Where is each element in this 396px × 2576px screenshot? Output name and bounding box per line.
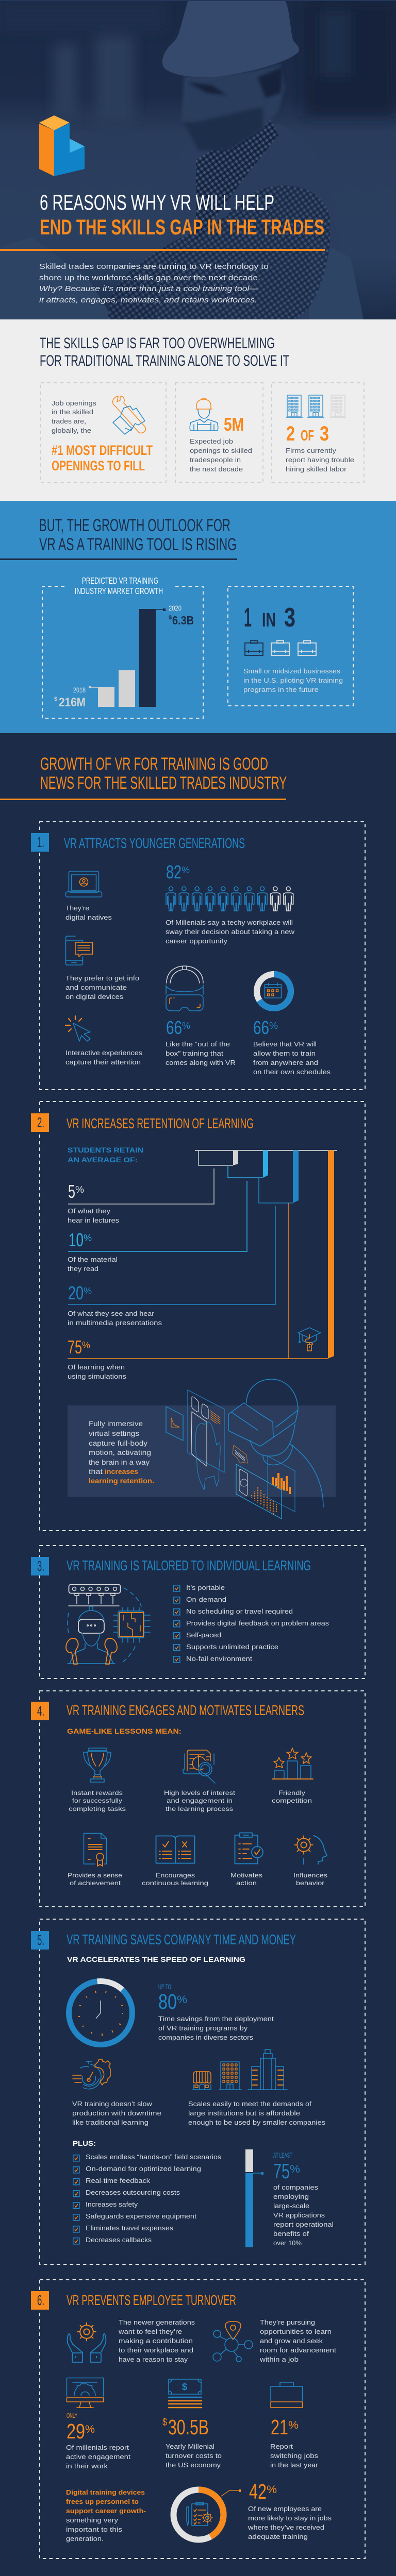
intro paragraph <box>39 263 269 304</box>
stat: 20 percent multimedia: 20 <box>68 1282 84 1303</box>
number badge 6 <box>31 2291 49 2310</box>
text: instant rewards: Instant rewards <box>71 1789 123 1797</box>
text: operational benefits: of companies <box>273 2184 318 2191</box>
number badge 4: 4. <box>37 1703 44 1719</box>
text: contribution: to their workplace and <box>119 2347 193 2354</box>
checklist: individual learning: On-demand <box>186 1596 226 1603</box>
subheading: plus: PLUS: <box>73 2139 96 2147</box>
text: contribution: want to feel they’re <box>118 2328 182 2335</box>
heading: growth outlook: BUT, THE GROWTH OUTLOOK FOR <box>39 516 230 535</box>
stat: only 29 percent: ONLY <box>67 2412 77 2419</box>
chart: clock ring <box>69 1981 132 2044</box>
text: turnover costs: the US economy <box>166 2462 221 2469</box>
text: digital training devices: Digital training devices <box>66 2489 145 2496</box>
panel: growth outlook <box>0 501 396 733</box>
stat: up to 80 percent: % <box>177 1994 187 2006</box>
checklist: individual learning: It’s portable <box>186 1584 225 1591</box>
subheading: game-like lessons: GAME-LIKE LESSONS MEAN: <box>67 1727 182 1735</box>
stat: 30.5B: $ <box>162 2417 167 2428</box>
stat: 10 percent reading <box>68 1229 118 1273</box>
text: train from anywhere: from anywhere and <box>253 1059 318 1066</box>
text: immersive settings: capture full-body <box>89 1439 147 1447</box>
text: time savings <box>158 2015 274 2041</box>
checklist: plus benefits: On-demand for optimized learning <box>86 2165 201 2173</box>
text: time savings: of VR training programs by <box>158 2025 248 2032</box>
icon: money stack: $ <box>182 2382 188 2393</box>
panel: reason 5 <box>31 1919 365 2264</box>
icon: report with magnifier <box>183 1750 215 1783</box>
card: difficult openings: #1 MOST DIFFICULT <box>52 443 153 458</box>
text: digital training devices: something very <box>66 2517 119 2524</box>
text: operational benefits: large-scale <box>273 2202 309 2210</box>
text: sense of achievement <box>68 1872 122 1887</box>
chart: VR training market growth <box>42 575 203 718</box>
subheading: speed of learning: VR ACCELERATES THE SPEED OF LEARNING <box>67 1955 245 1963</box>
text: advancement <box>259 2319 337 2363</box>
text: out of the box: Like the “out of the <box>166 1041 230 1048</box>
card: 1 in 3 businesses: programs in the future <box>243 686 319 693</box>
text: switching jobs <box>270 2443 318 2469</box>
text: operational benefits: employing <box>273 2193 309 2200</box>
stat: only 29 percent: 29 <box>67 2419 85 2443</box>
icon: cursor <box>65 1016 90 1041</box>
logo <box>39 115 85 176</box>
text: switching jobs: switching jobs <box>270 2452 318 2460</box>
subheading: students retain: STUDENTS RETAIN <box>68 1146 143 1154</box>
text: motivates action: action <box>236 1879 257 1887</box>
card: 1 in 3 businesses: IN <box>262 609 276 631</box>
text: continuous learning: Encourages <box>156 1872 195 1879</box>
checklist: individual learning: Self-paced <box>186 1632 221 1639</box>
text: digital training devices: important to this <box>66 2526 122 2533</box>
number badge 2 <box>31 1113 49 1132</box>
number badge 5 <box>31 1931 49 1950</box>
stat: 20 percent multimedia: in multimedia presentations <box>68 1319 162 1327</box>
stat: up to 80 percent: 80 <box>158 1990 177 2013</box>
chart: VR training market growth: 216M <box>59 696 86 709</box>
checklist: plus benefits: Decreases callbacks <box>86 2236 152 2244</box>
text: contribution <box>118 2319 195 2363</box>
text: new employees <box>248 2505 332 2540</box>
text: train from anywhere: allow them to train <box>253 1050 316 1057</box>
text: contribution: have a reason to stay <box>119 2356 188 2363</box>
intro paragraph: it attracts, engages, motivates, and retains workforces. <box>39 296 257 304</box>
text: out of the box: comes along with VR <box>166 1059 236 1066</box>
text: immersive settings: increases <box>105 1468 138 1476</box>
card: 5M job openings: the next decade <box>190 466 243 473</box>
card: 2 of 3 firms: Firms currently <box>286 447 337 454</box>
heading: reason 2: VR INCREASES RETENTION OF LEARNING <box>67 1115 254 1131</box>
text: interactive experiences <box>65 1049 142 1066</box>
stat: 5 percent lectures <box>68 1181 119 1224</box>
subheading: students retain: AN AVERAGE OF: <box>68 1156 138 1164</box>
panel: reason 3 <box>31 1546 365 1679</box>
text: instant rewards <box>69 1789 126 1812</box>
text: train from anywhere <box>253 1041 331 1076</box>
stat: at least 75 percent <box>273 2151 300 2183</box>
text: immersive settings: learning retention. <box>89 1477 154 1485</box>
stat: 21 percent: % <box>288 2419 299 2431</box>
stat: 5 percent lectures: Of what they <box>68 1208 111 1215</box>
card: 1 in 3 businesses: 3 <box>284 603 295 633</box>
text: contribution: making a contribution <box>119 2337 193 2345</box>
text: friendly competition <box>272 1789 312 1804</box>
callout panel: immersive <box>68 1405 336 1497</box>
text: millennials: career opportunity <box>166 938 228 945</box>
card: 1 in 3 businesses: in the U.S. piloting VR training <box>243 677 343 684</box>
icon: VR headset <box>166 966 203 1011</box>
number badge 2: 2. <box>37 1114 44 1130</box>
number badge 1 <box>31 833 49 852</box>
title: 6 REASONS WHY VR WILL HELP <box>40 190 274 214</box>
stat: 82 percent: % <box>182 865 190 875</box>
chart: 66 percent donut with calendar <box>257 974 291 1008</box>
heading: skills gap <box>40 335 289 369</box>
text: no downtime: like traditional learning <box>72 2119 148 2126</box>
text: continuous learning: continuous learning <box>142 1879 208 1887</box>
text: advancement: within a job <box>259 2356 299 2363</box>
text: out of the box <box>166 1041 236 1066</box>
icon: store and buildings <box>193 2049 287 2090</box>
panel: dark background for six reasons <box>0 733 396 2576</box>
heading: growth outlook <box>39 516 237 554</box>
stat: 66 percent like training: % <box>182 1021 190 1031</box>
text: immersive settings: motion, activating <box>89 1449 151 1456</box>
text: active engagement: Of millenials report <box>66 2444 129 2451</box>
icon: laptop <box>66 871 102 897</box>
text: time savings: companies in diverse sectors <box>158 2034 253 2041</box>
subheading: students retain <box>68 1146 143 1164</box>
card: 1 in 3 businesses <box>228 586 353 706</box>
stat: 20 percent multimedia: % <box>84 1286 92 1296</box>
heading: growth of VR <box>40 754 287 793</box>
text: instant rewards: for successfully <box>72 1797 122 1804</box>
text: active engagement: active engagement <box>66 2453 131 2461</box>
text: operational benefits: VR applications <box>273 2212 325 2219</box>
card: 2 of 3 firms: OF <box>301 428 314 444</box>
stat: 75 percent simulations: Of learning when <box>68 1364 125 1371</box>
chart: VR training market growth: 2020 <box>169 604 182 612</box>
icon: clipboard check <box>235 1833 263 1864</box>
stat: only 29 percent: % <box>85 2424 95 2435</box>
icon: hands holding gear <box>68 2323 106 2362</box>
stat: 10 percent reading: they read <box>68 1265 98 1273</box>
title <box>40 190 324 239</box>
stat: 66 percent believe: 66 <box>253 1017 269 1038</box>
checklist: individual learning: No scheduling or travel required <box>186 1608 293 1615</box>
number badge 3: 3. <box>37 1558 44 1574</box>
chart: VR training market growth: 6.3B <box>172 614 194 627</box>
text: new employees: Of new employees are <box>248 2505 322 2513</box>
checklist: plus benefits: Increases safety <box>86 2201 138 2208</box>
text: turnover costs: turnover costs to <box>166 2452 222 2460</box>
stat: at least 75 percent: AT LEAST <box>273 2151 292 2159</box>
text: advancement: room for advancement <box>260 2347 337 2354</box>
card: 2 of 3 firms <box>272 383 364 483</box>
icon: network with location pin <box>213 2321 253 2362</box>
stat: at least 75 percent: % <box>290 2163 300 2175</box>
chart: 75 percent bar <box>245 2149 263 2247</box>
panel: reason 1 <box>31 822 365 1090</box>
card: difficult openings: trades are, <box>52 418 86 425</box>
text: time savings: Time savings from the deployment <box>158 2015 274 2023</box>
card: 1 in 3 businesses: 1 <box>244 603 252 633</box>
stat: up to 80 percent: UP TO <box>158 1982 171 1991</box>
checklist: individual learning: Supports unlimited practice <box>186 1643 278 1651</box>
text: friendly competition: competition <box>272 1797 312 1804</box>
text: operational benefits <box>273 2184 334 2247</box>
chart: 42 percent donut <box>173 2489 241 2540</box>
text: sense of achievement: of achievement <box>70 1879 121 1887</box>
text: immersive settings: virtual settings <box>89 1430 139 1437</box>
stat: 75 percent simulations: % <box>82 1340 90 1350</box>
checklist: individual learning: Provides digital feedback on problem areas <box>186 1620 329 1627</box>
chart: VR training market growth: INDUSTRY MARKET GROWTH <box>75 586 163 596</box>
stat: 75 percent simulations: 75 <box>68 1336 82 1358</box>
icon: head with gear <box>294 1836 327 1865</box>
text: scales easily: large institutions but is affordable <box>188 2110 300 2117</box>
checklist: plus benefits: Decreases outsourcing costs <box>86 2189 180 2196</box>
card: 2 of 3 firms: 2 <box>286 422 295 445</box>
text: high levels of interest <box>164 1789 236 1812</box>
text: high levels of interest: and engagement in <box>167 1797 233 1804</box>
icon: buildings <box>286 395 346 417</box>
panel: reason 2 <box>31 1101 365 1531</box>
illustration: person in VR headset <box>166 1379 323 1519</box>
heading: reason 1: VR ATTRACTS YOUNGER GENERATIONS <box>64 835 245 851</box>
text: no downtime: production with downtime <box>72 2110 161 2117</box>
stat: 66 percent like training: 66 <box>166 1017 182 1038</box>
checklist: plus benefits: Real-time feedback <box>86 2177 151 2184</box>
text: digital training devices: support career growth- <box>66 2507 146 2515</box>
text: motivates action: Motivates <box>230 1872 262 1879</box>
text: motivates action <box>230 1872 262 1887</box>
icon: stopwatch and gear <box>73 2059 110 2089</box>
icon: graduation cap <box>298 1328 321 1351</box>
text: scales easily: Scales easily to meet the demands of <box>188 2100 312 2108</box>
text: interactive experiences: capture their attention <box>65 1059 141 1066</box>
text: instant rewards: completing tasks <box>69 1805 126 1812</box>
text: digital devices: on digital devices <box>65 993 123 1001</box>
stat: 20 percent multimedia <box>68 1282 162 1327</box>
text: turnover costs <box>166 2443 222 2469</box>
panel: reason 6 <box>31 2280 365 2558</box>
card: 1 in 3 businesses: Small or midsized businesses <box>243 668 340 675</box>
heading: skills gap: THE SKILLS GAP IS FAR TOO OVERWHELMING <box>40 335 275 352</box>
text: digital natives <box>65 905 112 921</box>
card: difficult openings: globally, the <box>52 427 91 434</box>
text: new employees: more likely to stay in jobs <box>248 2515 332 2522</box>
icon: wrench and hand <box>113 396 146 434</box>
text: advancement: opportunities to learn <box>260 2328 332 2335</box>
card: 5M job openings: Expected job <box>190 438 233 445</box>
stat: 75 percent simulations <box>68 1336 126 1380</box>
icon: open book <box>156 1836 195 1863</box>
text: continuous learning <box>142 1872 208 1887</box>
chart: VR training market growth: PREDICTED VR TRAINING <box>82 575 158 586</box>
text: operational benefits: report operational <box>273 2221 334 2228</box>
checklist: plus benefits <box>73 2154 221 2244</box>
chart: VR training market growth: 2018 <box>73 686 86 694</box>
text: scales easily: enough to be used by smaller companies <box>188 2119 325 2126</box>
text: high levels of interest: the learning process <box>166 1805 233 1812</box>
text: new employees: where they’ve received <box>248 2524 324 2531</box>
stat: 30.5B <box>162 2415 209 2439</box>
checklist: plus benefits: Safeguards expensive equipment <box>86 2213 197 2220</box>
stat: 66 percent believe: % <box>269 1021 278 1031</box>
text: millennials: sway their decision about taking a new <box>166 928 295 936</box>
icon: monitor with gear <box>67 2378 103 2408</box>
number badge 4 <box>31 1702 49 1720</box>
text: no downtime: VR training doesn’t slow <box>72 2100 153 2108</box>
checklist: plus benefits: Scales endless “hands-on” field scenarios <box>86 2154 221 2161</box>
text: immersive settings: the brain in a way <box>89 1459 150 1466</box>
text: high levels of interest: High levels of interest <box>164 1789 236 1797</box>
text: turnover costs: Yearly Millenial <box>166 2443 214 2450</box>
text: immersive settings <box>89 1420 154 1485</box>
chart: VR training market growth: $ <box>169 615 172 621</box>
number badge 6: 6. <box>37 2292 44 2308</box>
text: digital training devices: generation. <box>66 2535 104 2543</box>
text: sense of achievement: Provides a sense <box>68 1872 122 1879</box>
text: scales easily <box>188 2100 325 2126</box>
text: digital training devices <box>66 2489 146 2543</box>
stat: 42 percent: 42 <box>249 2480 267 2503</box>
heading: growth outlook: VR AS A TRAINING TOOL IS RISING <box>39 535 237 554</box>
text: influences behavior <box>293 1872 327 1887</box>
stat: at least 75 percent: 75 <box>273 2159 290 2183</box>
stat: 10 percent reading: 10 <box>69 1229 84 1250</box>
stat: 20 percent multimedia: Of what they see and hear <box>68 1310 154 1317</box>
checklist: plus benefits: Eliminates travel expenses <box>86 2225 173 2232</box>
title underline <box>0 249 325 251</box>
card: 2 of 3 firms: 3 <box>320 422 329 445</box>
text: digital natives: They’re <box>65 905 89 912</box>
stat: 10 percent reading: % <box>84 1233 92 1243</box>
text: train from anywhere: Believe that VR will <box>253 1041 317 1048</box>
illustration: VR learner with circuit <box>66 1585 150 1664</box>
text: interactive experiences: Interactive experiences <box>65 1049 142 1057</box>
card: 5M job openings: openings to skilled <box>190 447 252 454</box>
icon: briefcase <box>271 2382 302 2408</box>
text: advancement: They’re pursuing <box>260 2319 315 2326</box>
text: contribution: The newer generations <box>119 2319 195 2326</box>
text: advancement: and grow and seek <box>260 2337 323 2345</box>
text: influences behavior: behavior <box>296 1879 324 1887</box>
panel: hero photo <box>0 0 396 319</box>
text: digital devices <box>65 975 139 1001</box>
text: active engagement: in their work <box>66 2463 108 2470</box>
stat: 21 percent: 21 <box>271 2415 288 2439</box>
card: difficult openings: Job openings <box>52 400 96 407</box>
text: new employees: adequate training <box>248 2533 308 2540</box>
intro paragraph: shore up the workforce skills gap over the next decade. <box>39 274 260 282</box>
heading: growth of VR: GROWTH OF VR FOR TRAINING IS GOOD <box>40 754 268 774</box>
text: digital natives: digital natives <box>65 914 112 921</box>
icon: money stack <box>169 2379 202 2408</box>
text: train from anywhere: on their own schedules <box>253 1069 331 1076</box>
panel: skills gap <box>0 319 396 501</box>
card: 5M job openings: 5M <box>224 414 244 435</box>
text: out of the box: box” training that <box>166 1050 224 1057</box>
text: influences behavior: Influences <box>293 1872 327 1879</box>
card: 2 of 3 firms: hiring skilled labor <box>286 466 346 473</box>
card: 2 of 3 firms: report having trouble <box>286 456 354 464</box>
text: switching jobs: Report <box>270 2443 293 2450</box>
icon: ten people <box>166 887 293 911</box>
text: immersive settings: that <box>89 1468 103 1476</box>
card: difficult openings: OPENINGS TO FILL <box>52 458 145 473</box>
stat: 82 percent: 82 <box>166 861 182 883</box>
checklist: individual learning: No-fail environment <box>186 1655 253 1663</box>
text: digital devices: They prefer to get info <box>65 975 139 982</box>
text: digital devices: and communicate <box>65 984 127 991</box>
text: millennials: Of Millenials say a techy workplace will <box>166 919 293 926</box>
icon: worker <box>190 398 218 431</box>
number badge 1: 1. <box>37 834 44 850</box>
text: active engagement <box>66 2444 131 2470</box>
text: digital training devices: frees up personnel to <box>66 2498 139 2505</box>
intro paragraph: Skilled trades companies are turning to VR technology to <box>39 263 269 271</box>
number badge 3 <box>31 1557 49 1575</box>
number badge 5: 5. <box>37 1932 44 1948</box>
stat: 10 percent reading: Of the material <box>68 1256 118 1263</box>
icon: trophy <box>84 1748 111 1782</box>
card: difficult openings <box>41 383 166 483</box>
text: no downtime <box>72 2100 161 2126</box>
stat: 5 percent lectures: 5 <box>68 1181 75 1202</box>
icon: briefcases <box>245 641 316 655</box>
text: millennials <box>166 919 295 945</box>
panel: reason 4 <box>31 1691 365 1907</box>
card: 5M job openings: tradespeople in <box>190 456 241 464</box>
chart: VR training market growth: $ <box>54 696 57 702</box>
checklist: individual learning <box>174 1584 329 1663</box>
text: operational benefits: benefits of <box>273 2230 309 2238</box>
card: difficult openings: in the skilled <box>52 409 93 416</box>
stat: 75 percent simulations: using simulations <box>68 1373 126 1380</box>
text: immersive settings: Fully immersive <box>89 1420 143 1428</box>
stat: 42 percent: % <box>267 2484 277 2496</box>
stat: only 29 percent <box>67 2412 95 2443</box>
text: friendly competition: Friendly <box>278 1789 305 1797</box>
text: switching jobs: in the last year <box>270 2462 318 2469</box>
stat: 5 percent lectures: hear in lectures <box>68 1217 119 1224</box>
icon: phone with chat <box>66 936 93 965</box>
stat: 30.5B: 30.5B <box>168 2415 209 2439</box>
stat: 5 percent lectures: % <box>75 1184 84 1195</box>
stat: up to 80 percent <box>158 1982 187 2013</box>
intro paragraph: Why? Because it’s more than just a cool training tool— <box>39 285 259 293</box>
chart: retention bars <box>68 1150 337 1359</box>
heading: reason 6: VR PREVENTS EMPLOYEE TURNOVER <box>67 2292 236 2308</box>
icon: stars and podium <box>272 1748 313 1779</box>
icon: certificate <box>84 1833 106 1866</box>
card: 5M job openings <box>175 383 263 483</box>
text: operational benefits: over 10% <box>273 2240 302 2247</box>
